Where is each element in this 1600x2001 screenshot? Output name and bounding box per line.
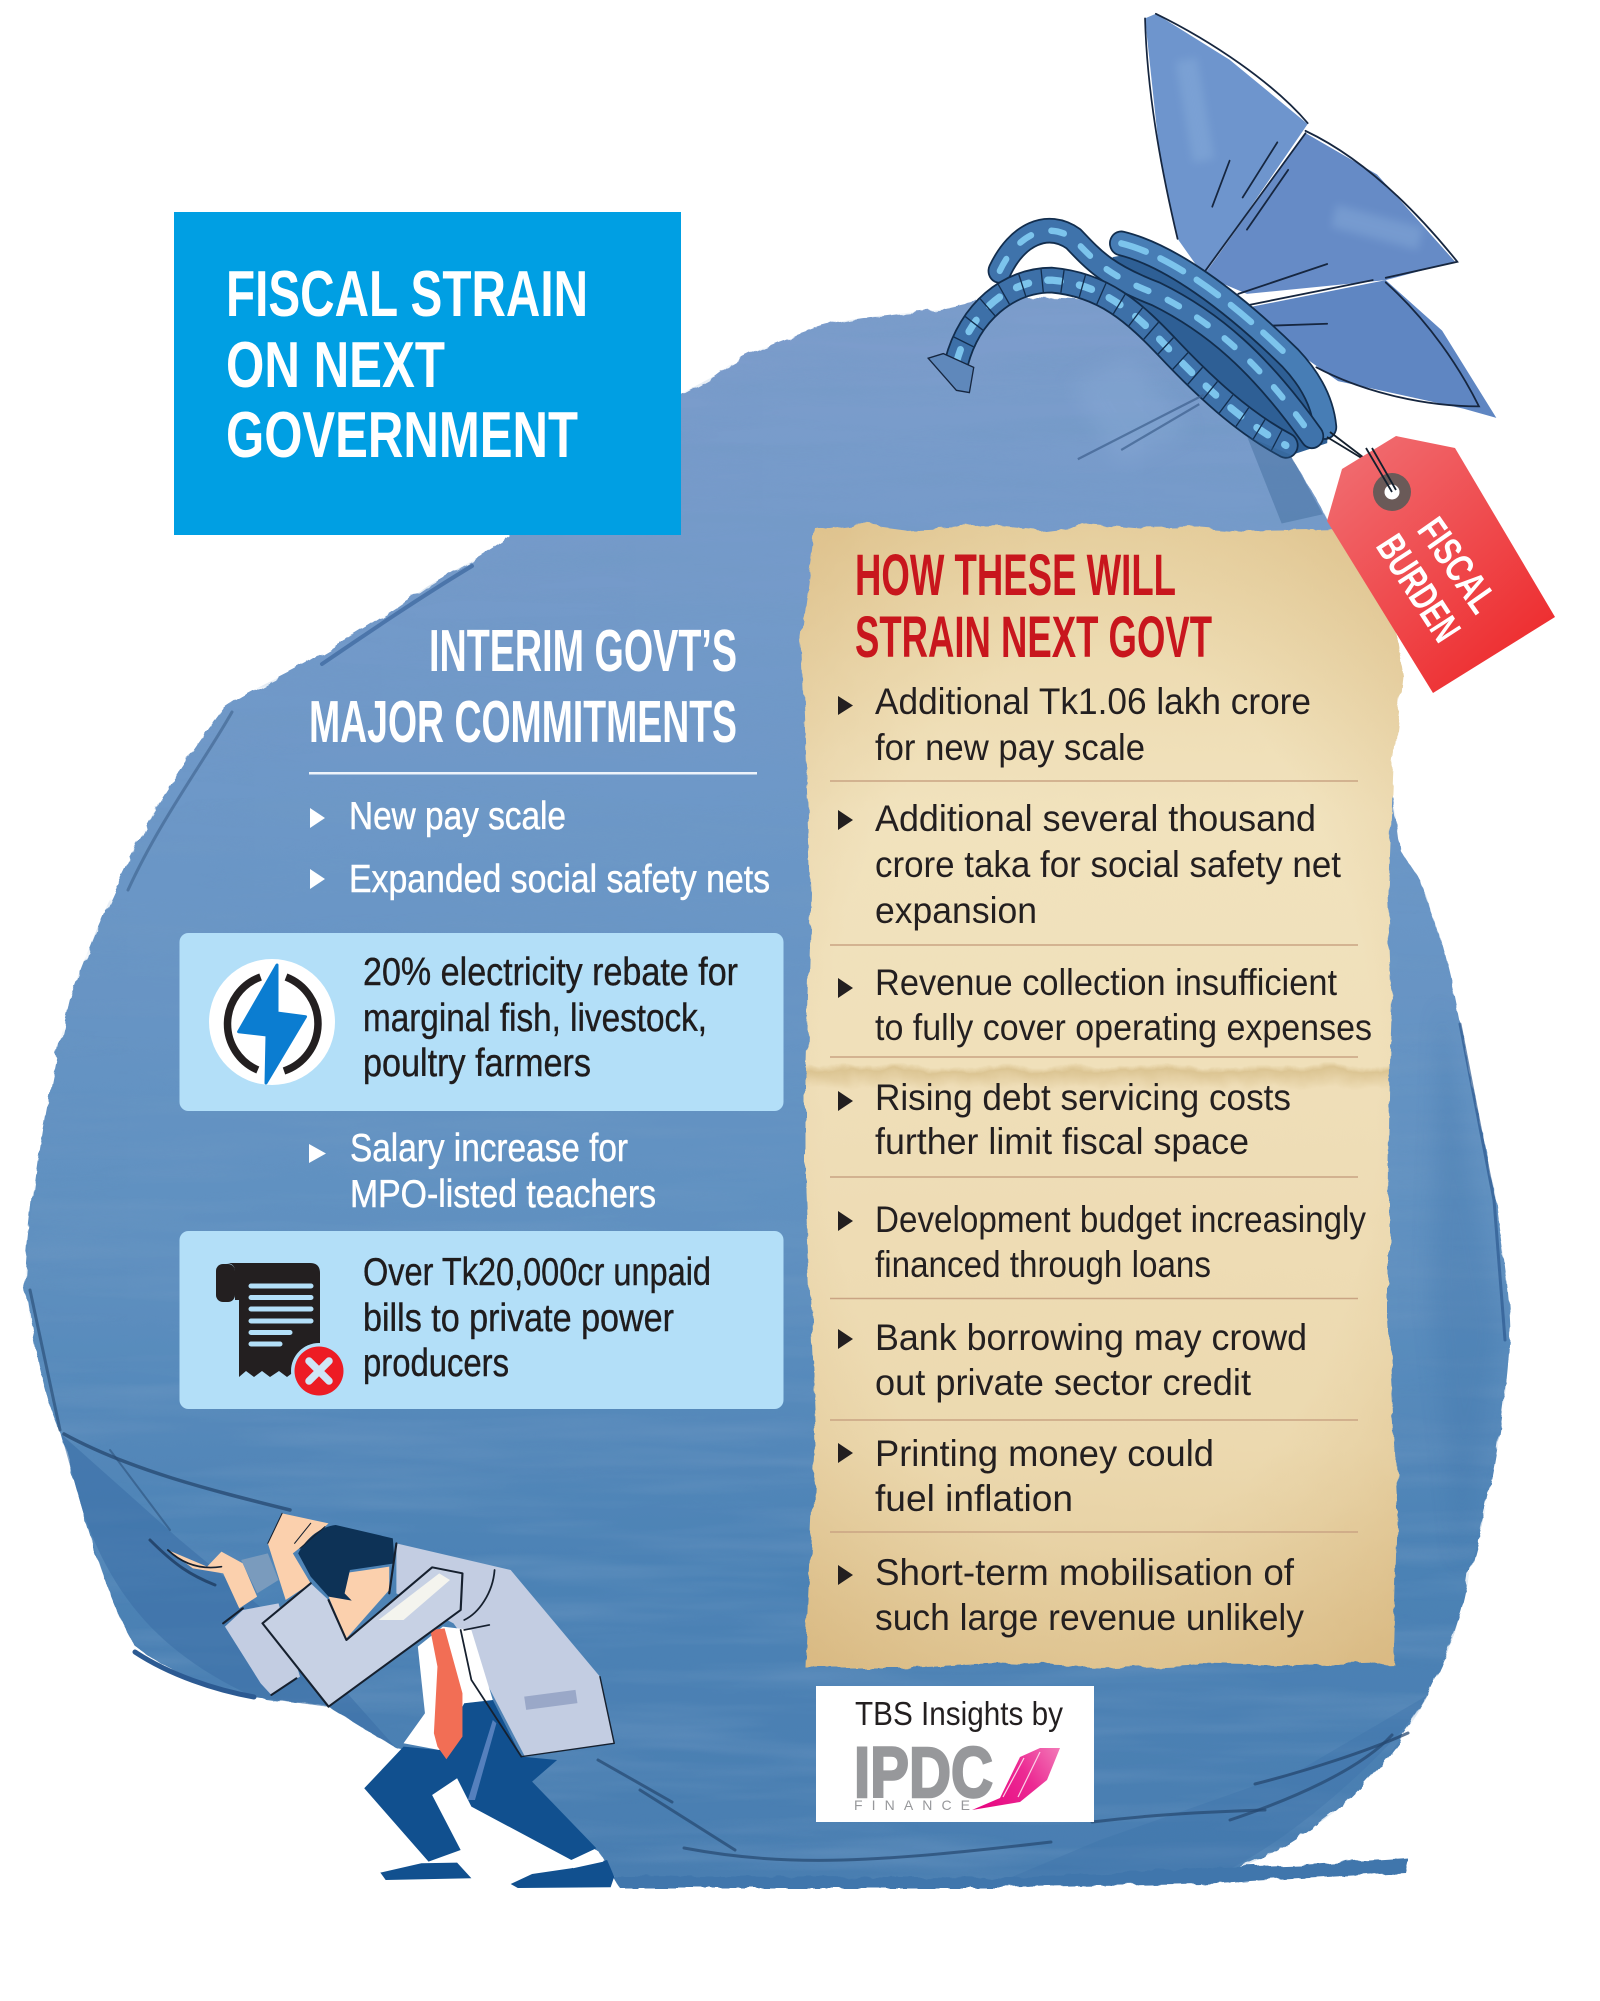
coat xyxy=(396,1543,614,1757)
item: debt servicing: further limit fiscal space xyxy=(875,1121,1249,1162)
sponsor logo: TBS Insights by IPDC Finance: TBS Insights by xyxy=(855,1695,1063,1732)
torn parchment sheet xyxy=(801,524,1403,1668)
arm skin far xyxy=(168,1550,257,1608)
shirt xyxy=(404,1627,493,1750)
item: short-term revenue: such large revenue unlikely xyxy=(875,1597,1304,1638)
item: revenue shortfall: Revenue collection insufficient xyxy=(875,962,1338,1003)
tag eyelet xyxy=(1366,448,1411,511)
far arm xyxy=(225,1603,300,1695)
callout text: Over Tk20,000cr unpaid xyxy=(363,1251,711,1294)
item: printing money xyxy=(838,1433,1214,1519)
rope bundle backing xyxy=(1113,248,1329,457)
item: safety net cost: Additional several thousand xyxy=(875,798,1316,839)
item: safety net cost: crore taka for social safety net xyxy=(875,844,1342,885)
item: pay scale cost: for new pay scale xyxy=(875,727,1145,768)
item: safety net cost: expansion xyxy=(875,890,1037,931)
panel: interim govt major commitments xyxy=(180,618,784,1409)
illustration: man pushing the sack xyxy=(168,1513,614,1888)
shoes xyxy=(380,1860,614,1888)
item: printing money: fuel inflation xyxy=(875,1478,1073,1519)
heading: commitments: MAJOR COMMITMENTS xyxy=(309,689,737,755)
fabric ear middle xyxy=(1204,133,1455,294)
callout text xyxy=(363,951,738,1085)
callout: electricity rebate xyxy=(180,933,784,1111)
sponsor logo: TBS Insights by IPDC Finance: FINANCE xyxy=(854,1797,970,1813)
bullet: new pay scale: New pay scale xyxy=(349,795,566,838)
bullet: expanded social safety nets: Expanded social safety nets xyxy=(349,858,770,901)
face xyxy=(329,1567,389,1638)
item: short-term revenue: Short-term mobilisation of xyxy=(875,1552,1295,1593)
rope tie xyxy=(956,231,1325,445)
bullet: MPO teachers salary: MPO-listed teachers xyxy=(350,1173,656,1216)
item: bank borrowing: out private sector credit xyxy=(875,1362,1252,1403)
heading: commitments xyxy=(309,618,737,755)
heading: strain xyxy=(855,543,1212,670)
icon: bill with red cross xyxy=(216,1263,347,1399)
IPDC swoosh xyxy=(972,1748,1060,1810)
tag label xyxy=(1367,510,1505,650)
arm skin near xyxy=(268,1513,329,1600)
item: bank borrowing xyxy=(838,1317,1307,1403)
item: pay scale cost xyxy=(838,681,1311,768)
sponsor logo: TBS Insights by IPDC Finance xyxy=(816,1686,1094,1822)
IPDC wordmark: IPDC xyxy=(854,1734,993,1813)
illustration: red price tag xyxy=(1327,432,1555,693)
callout: unpaid power bills xyxy=(180,1231,784,1409)
hair xyxy=(298,1525,395,1601)
panel: how these will strain next govt (parchment) xyxy=(801,524,1403,1668)
callout text xyxy=(363,1251,711,1385)
item: revenue shortfall: to fully cover operating expenses xyxy=(875,1007,1372,1048)
item: short-term revenue xyxy=(838,1552,1304,1638)
tie xyxy=(430,1628,462,1759)
title text xyxy=(226,257,588,471)
callout text: 20% electricity rebate for xyxy=(363,951,738,994)
item: development budget: financed through loans xyxy=(875,1244,1211,1285)
callout text: poultry farmers xyxy=(363,1042,591,1085)
callout text: producers xyxy=(363,1342,509,1385)
fabric ear lower xyxy=(1247,280,1496,418)
tag label: FISCAL xyxy=(1409,510,1505,621)
item: pay scale cost: Additional Tk1.06 lakh crore xyxy=(875,681,1311,722)
title text: ON NEXT xyxy=(226,328,445,401)
heading: strain: HOW THESE WILL xyxy=(855,543,1176,608)
title text: GOVERNMENT xyxy=(226,398,578,471)
ground shadow brush stroke xyxy=(612,1858,1408,1888)
heading: strain: STRAIN NEXT GOVT xyxy=(855,605,1212,670)
item: revenue shortfall xyxy=(838,962,1372,1048)
callout text: marginal fish, livestock, xyxy=(363,997,707,1040)
item: safety net cost xyxy=(838,798,1342,931)
title text: FISCAL STRAIN xyxy=(226,257,588,330)
heading: commitments: INTERIM GOVT’S xyxy=(429,618,737,684)
trousers xyxy=(364,1700,596,1862)
bullet: MPO teachers salary xyxy=(309,1127,656,1216)
bullet: MPO teachers salary: Salary increase for xyxy=(350,1127,628,1170)
tag label: BURDEN xyxy=(1367,527,1469,650)
icon: lightning power xyxy=(209,959,335,1085)
item: development budget: Development budget increasingly xyxy=(875,1199,1366,1240)
item: debt servicing xyxy=(838,1077,1291,1162)
illustration: sack knot, fabric ears and rope xyxy=(928,14,1496,523)
near arm xyxy=(262,1568,461,1707)
item: development budget xyxy=(838,1199,1366,1285)
item: debt servicing: Rising debt servicing costs xyxy=(875,1077,1291,1118)
fabric ear top xyxy=(1145,14,1308,276)
title box xyxy=(174,212,681,535)
item: bank borrowing: Bank borrowing may crowd xyxy=(875,1317,1307,1358)
item: printing money: Printing money could xyxy=(875,1433,1214,1474)
callout text: bills to private power xyxy=(363,1297,674,1340)
